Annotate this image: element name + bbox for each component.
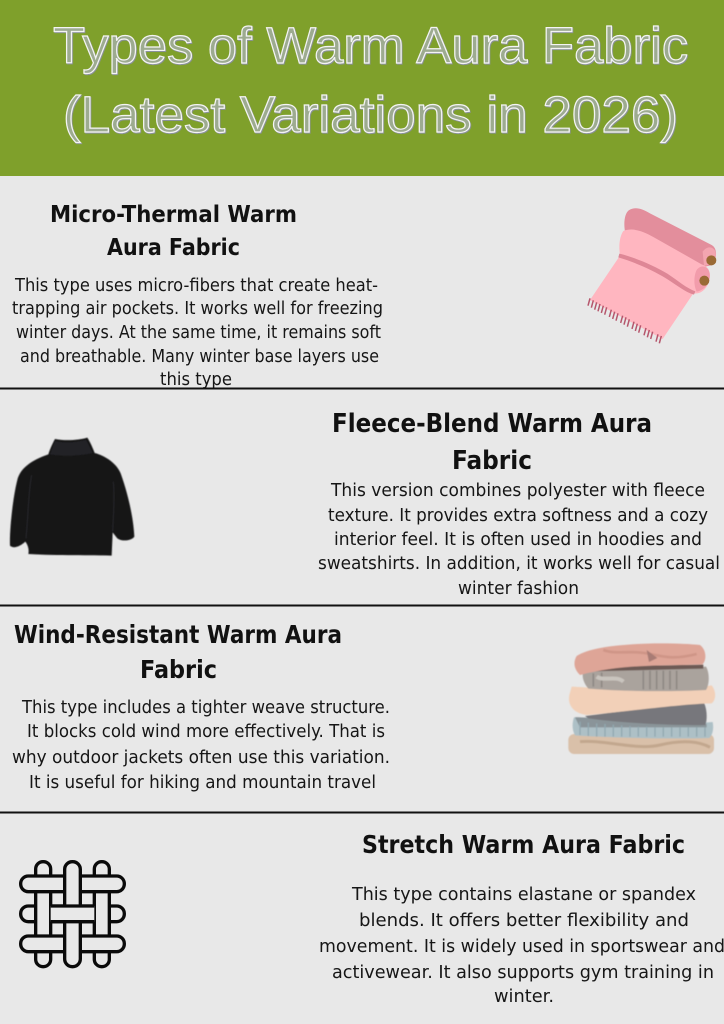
text block: fleece-blend description: interior feel. It is often used in hoodies and <box>334 530 702 550</box>
text block: wind-resistant description: It is useful for hiking and mountain travel <box>29 773 376 793</box>
icon: woven fabric pattern <box>21 862 124 967</box>
text block: micro-thermal description: trapping air pockets. It works well for freezing <box>12 299 383 319</box>
title: Types of Warm Aura Fabric <box>53 17 688 74</box>
heading: fleece-blend <box>332 409 652 476</box>
divider 3 <box>0 812 724 814</box>
text block: stretch description: blends. It offers better flexibility and <box>359 911 689 931</box>
icon: stack of folded knitwear <box>568 643 715 754</box>
text block: micro-thermal description <box>12 276 383 390</box>
text block: micro-thermal description: this type <box>160 370 232 390</box>
title <box>53 17 688 143</box>
header banner <box>0 0 724 176</box>
heading: micro-thermal: Micro-Thermal Warm <box>50 202 297 228</box>
text block: stretch description: This type contains elastane or spandex <box>351 885 696 905</box>
text block: micro-thermal description: This type uses micro-fibers that create heat- <box>14 276 378 296</box>
heading: wind-resistant <box>14 620 342 684</box>
heading: micro-thermal <box>50 202 297 261</box>
divider 1 <box>0 388 724 390</box>
text block: fleece-blend description: This version combines polyester with fleece <box>330 481 705 501</box>
heading: fleece-blend: Fabric <box>452 446 532 476</box>
text block: wind-resistant description <box>12 698 390 793</box>
panel: stretch <box>21 830 724 1007</box>
text block: micro-thermal description: winter days. At the same time, it remains soft <box>16 323 381 343</box>
text block: stretch description: winter. <box>494 987 554 1007</box>
text block: wind-resistant description: why outdoor jackets often use this variation. <box>12 748 390 768</box>
title: (Latest Variations in 2026) <box>63 86 678 143</box>
text block: fleece-blend description: winter fashion <box>458 579 579 599</box>
panel: fleece-blend <box>10 409 720 599</box>
heading: fleece-blend: Fleece-Blend Warm Aura <box>332 409 652 439</box>
text block: stretch description: activewear. It also supports gym training in <box>332 963 714 983</box>
text block: fleece-blend description: sweatshirts. In addition, it works well for casual <box>318 554 720 574</box>
panel: wind-resistant <box>12 620 715 793</box>
text block: fleece-blend description <box>318 481 720 599</box>
heading: stretch: Stretch Warm Aura Fabric <box>362 830 685 859</box>
text block: wind-resistant description: It blocks cold wind more effectively. That is <box>27 722 385 742</box>
heading: wind-resistant: Wind-Resistant Warm Aura <box>14 620 342 649</box>
text block: wind-resistant description: This type includes a tighter weave structure. <box>21 698 390 718</box>
text block: stretch description: movement. It is widely used in sportswear and <box>319 937 724 957</box>
heading: micro-thermal: Aura Fabric <box>107 235 240 261</box>
heading: wind-resistant: Fabric <box>140 655 217 684</box>
text block: stretch description <box>319 885 724 1007</box>
icon: black sweater <box>10 438 134 556</box>
text block: micro-thermal description: and breathable. Many winter base layers use <box>20 347 379 367</box>
icon: rolled pink scarf <box>588 208 716 343</box>
panel: micro-thermal <box>12 202 716 390</box>
divider 2 <box>0 604 724 606</box>
text block: fleece-blend description: texture. It provides extra softness and a cozy <box>328 506 708 526</box>
